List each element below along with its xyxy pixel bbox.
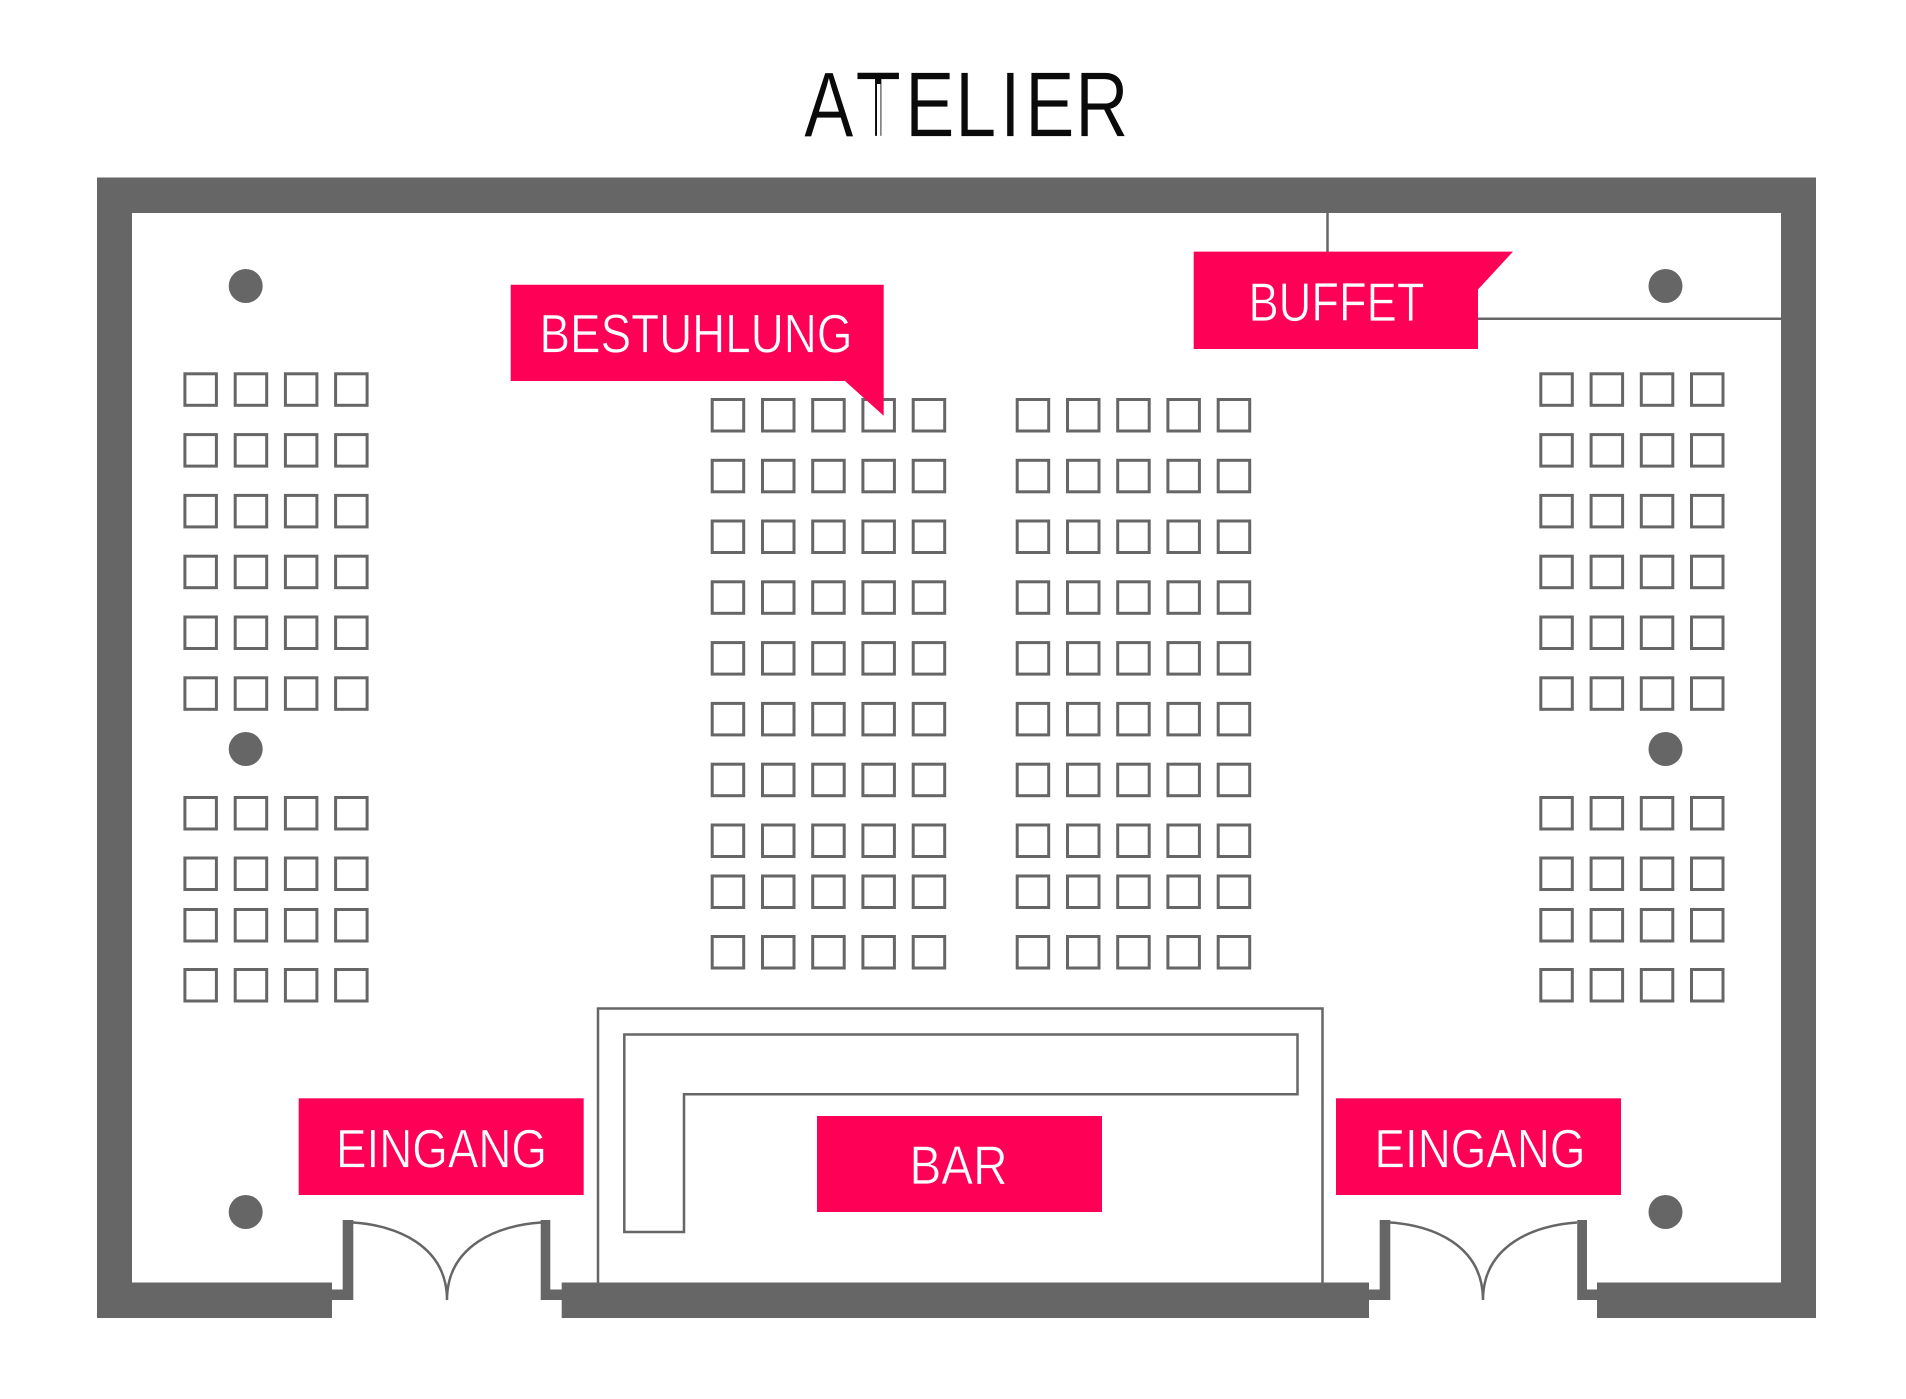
seating block: far left [185, 374, 367, 1001]
label: right entrance [1336, 1098, 1621, 1195]
label: bar: BAR [910, 1134, 1008, 1196]
right door [1369, 1220, 1597, 1300]
label: left entrance [299, 1098, 584, 1195]
bar enclosure [598, 1008, 1322, 1282]
label: left entrance: EINGANG [336, 1118, 547, 1180]
label: Bestuhlung [511, 285, 884, 416]
title: ATELIER [804, 53, 1129, 156]
buffet partition lines [1328, 213, 1781, 319]
seating block: centre left [712, 400, 945, 968]
bar counter [624, 1034, 1298, 1232]
walls [97, 178, 1816, 1318]
label: Buffet [1194, 252, 1513, 349]
label: bar [817, 1116, 1102, 1212]
seating block: far right [1541, 374, 1723, 1001]
label: right entrance: EINGANG [1374, 1118, 1586, 1180]
label: Bestuhlung: BESTUHLUNG [540, 302, 852, 364]
pillars [229, 269, 1683, 1229]
label: Buffet: BUFFET [1248, 271, 1424, 333]
seating block: centre right [1017, 400, 1250, 968]
left door [332, 1220, 562, 1300]
